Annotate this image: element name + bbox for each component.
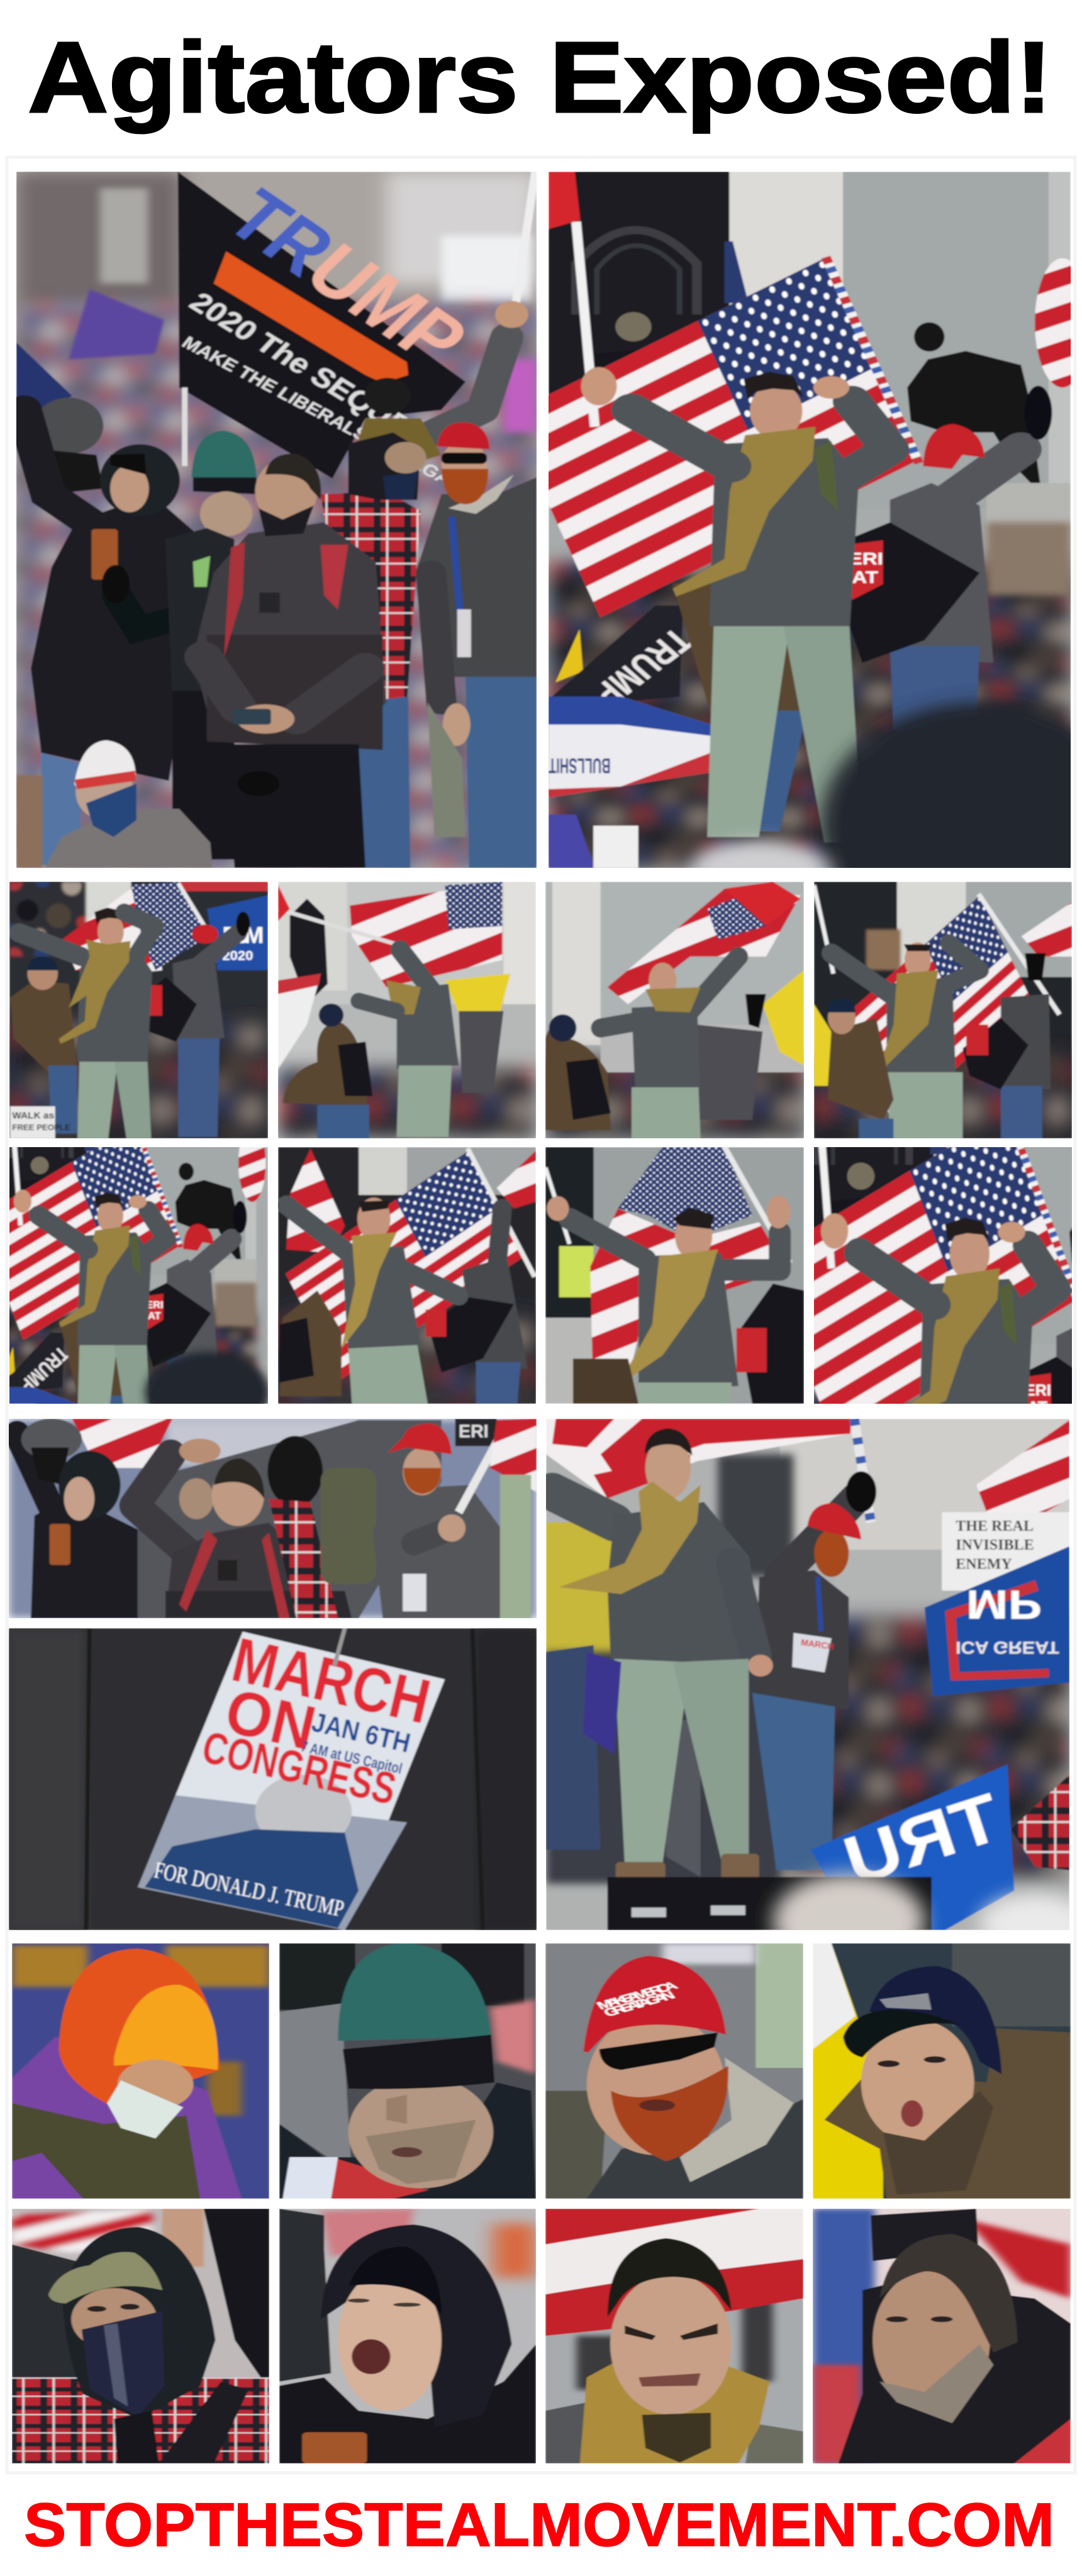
blue Trump flag bottom: TRU [835,1779,1010,1900]
sign: walk as free people: WALK as [12,1111,54,1121]
panel: zoomed-out man with flag [9,1147,268,1404]
sign: walk as free people: FREE PEOPLE [12,1123,70,1132]
portrait: navy cap man in brown coat [813,1943,1071,2199]
kneeling man with white cap and blue mask [16,740,212,868]
panel: man beside sign and blue flag [9,882,268,1138]
second man with backpack [845,386,1052,730]
man with scarf [286,1197,459,1404]
yellow flag [445,974,510,1024]
blue Trump flag bottom [811,1765,1069,1930]
portrait: man with stubble and hood [813,2209,1071,2463]
badge card: JAN 6TH [309,1707,413,1759]
person in brown jacket [827,999,893,1138]
second man with backpack: AT [852,569,878,587]
woman in black hood [17,1419,138,1618]
hooded figure in plaid [267,1436,338,1618]
second man with backpack [426,1209,528,1404]
portrait: masked man in hood and plaid [12,2209,269,2463]
man in brown jacket [10,957,77,1133]
yellow flag [762,970,804,1065]
panel: March on Congress badge closeup [9,1624,537,1930]
panel: man with large American flag [549,172,1071,868]
plaid man [321,433,427,868]
man with red cap and beard [417,422,537,868]
panel: man shouting with flag above [545,882,804,1138]
barber pole and flag [459,1419,537,1618]
right striped flag [976,1420,1069,1540]
badge card: CONGRESS [198,1722,401,1814]
badge card: MARCH [226,1624,437,1737]
blue sign [207,896,268,970]
portrait: woman in dark hood with phone [279,2209,536,2463]
right small flag [497,1150,536,1209]
man with scarf [831,942,980,1138]
blurred foreground [821,702,1082,950]
red-capped man pointing [752,1471,876,1870]
blue sign: RUM [222,922,264,948]
woman in black puffer [24,410,196,865]
man with scarf [547,1196,790,1404]
portrait: red cap man with sunglasses: MAKE AMERICA [594,1979,680,2012]
portrait: orange hood person [12,1943,269,2199]
capitol arch doorway [549,172,729,419]
portrait: red cap man with sunglasses [545,1943,803,2199]
banners below flag: TRUMP [584,621,701,714]
man with grimace and scarf [552,1428,773,1882]
badge card: ON [219,1675,322,1764]
sign: walk as free people [10,1106,70,1138]
grey man behind [459,1011,503,1092]
person with backpack left [279,1291,342,1396]
title: Agitators Exposed! [28,21,1052,133]
white banner [278,974,321,1069]
man with hands in heart shape [135,1438,352,1618]
sign: the real invisible enemy: INVISIBLE [956,1537,1034,1553]
flag pole with red pennant [549,172,594,427]
person in brown jacket with backpack [283,1004,372,1138]
footer website address: STOPTHESTEALMOVEMENT.COM [24,2490,1054,2559]
banners below flag [549,606,711,868]
man with camera and backpack [193,453,386,868]
grey beanie person [35,397,103,494]
yellow flag [814,1004,831,1086]
person in brown jacket with backpack [545,1014,611,1130]
American flag [590,1147,790,1365]
portrait: red cap man with sunglasses: GREAT AGAIN [601,1989,678,2019]
Trump flag [178,172,484,498]
panel: crowd under Trump flag [16,172,537,868]
panel: man raising flag pole [278,882,536,1138]
second man with backpack [962,953,1051,1138]
man with scarf [601,957,766,1138]
main man with scarf [19,908,155,1193]
Trump flag: MAKE THE LIBERALS CRY AGAIN [178,333,473,498]
top right flag [1022,902,1072,957]
waving flag [278,882,502,987]
grey man behind [697,1024,762,1120]
Trump flag: TRUMP [209,175,484,381]
blue flag upper right [925,1546,1069,1696]
red-capped man pointing: MARCH [800,1638,835,1652]
second man with backpack [142,912,250,1137]
American flag [286,1148,535,1379]
badge card [138,1624,445,1930]
sign: the real invisible enemy: ENEMY [956,1557,1012,1572]
man with scarf from behind flag [359,950,459,1137]
raised arm man [353,301,528,472]
American flag [814,885,1059,1124]
blue flag upper right: MP [966,1582,1042,1628]
American flag [507,257,919,618]
portrait: grimacing man with tan scarf [545,2209,803,2463]
blue flag upper right: ICA GREAT [956,1638,1059,1657]
teal hat man [165,431,257,860]
vehicle roof [608,1877,932,1930]
Trump flag: 2020 The SEQUEL [183,287,434,452]
flag behind head [545,2209,803,2336]
badge card: 7 AM at US Capitol [299,1738,404,1777]
second man with backpack: ERI [849,550,883,569]
panel: man shouting with raised hand [545,1147,804,1404]
left small flag [286,1148,345,1253]
panel: group chanting wide shot: ERI [459,1421,489,1441]
soldier in background [290,899,328,1004]
sign: the real invisible enemy: THE REAL [956,1518,1034,1535]
ginger man in red cap [372,1424,507,1618]
blue sign: 2020 [222,948,253,963]
main man with scarf [581,367,890,843]
man with backpack edge [573,1284,804,1404]
panel: group chanting wide shot [9,1419,537,1618]
panel: man gesturing, flag behind [278,1147,536,1404]
panel: two men standing on vehicle [546,1419,1069,1930]
portrait: teal beanie man [279,1943,536,2199]
right striped flag [1035,258,1082,387]
olive backpack [321,1468,376,1584]
grey jacket behind [138,1420,442,1618]
sign: the real invisible enemy [942,1513,1069,1591]
panel: close view of man and flag [814,1147,1072,1404]
flag overhead [546,1419,871,1523]
waving flag [608,882,801,1004]
man behind in brown and jeans [672,579,807,831]
panel: man in front of flag, left arm raised [814,882,1072,1138]
police in background [907,322,1042,494]
